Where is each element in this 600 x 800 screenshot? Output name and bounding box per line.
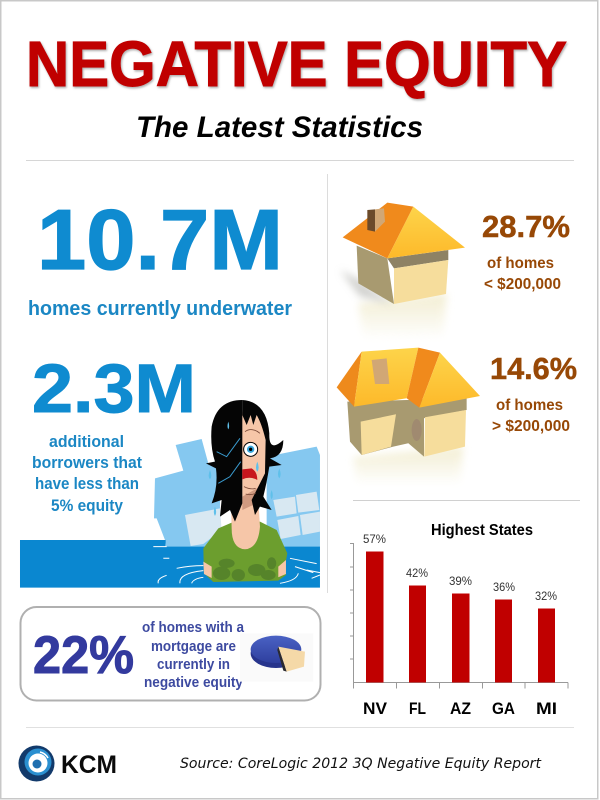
shirt: [203, 522, 287, 582]
stat: 10.7M homes underwater: [28, 193, 292, 320]
stat: 2.3M borrowers: [32, 350, 196, 515]
state labels: NV: [363, 699, 388, 718]
chart title: Highest States: [431, 522, 533, 539]
callout: 22% negative equity: mortgage are: [151, 638, 236, 655]
neck and face: [231, 411, 266, 549]
stat: 2.3M borrowers: 2.3M: [32, 350, 196, 427]
flood water: [20, 540, 320, 588]
stat: 10.7M homes underwater: 10.7M: [37, 193, 283, 288]
icon: pie chart: [240, 633, 313, 682]
stat: 28.7%: of homes: [487, 255, 554, 272]
logo: KCM: KCM: [61, 751, 117, 779]
state labels: FL: [409, 699, 426, 718]
value labels: 39%: [449, 574, 472, 588]
hair: [206, 400, 283, 522]
stat: 2.3M borrowers: additional: [49, 433, 124, 451]
stat: 28.7%: 28.7%: [482, 209, 570, 244]
logo swirl: [18, 746, 54, 782]
stat: 2.3M borrowers: borrowers that: [32, 454, 142, 472]
callout: 22% negative equity: of homes with a: [142, 619, 245, 636]
sinking house: [154, 439, 320, 548]
stat: 2.3M borrowers: 5% equity: [51, 497, 124, 515]
subtitle: The Latest Statistics: [136, 111, 423, 144]
stat: 10.7M homes underwater: homes currently underwater: [28, 298, 292, 320]
value labels: 42%: [406, 566, 428, 580]
stat: 14.6%: [490, 351, 577, 435]
stat: 28.7%: < $200,000: [484, 276, 561, 293]
face details: [209, 422, 281, 516]
stat: 14.6%: > $200,000: [492, 418, 570, 435]
callout: 22% negative equity: currently in: [157, 656, 230, 673]
house icon: over 200k: [337, 348, 480, 485]
source note: Source: CoreLogic 2012 3Q Negative Equity Report: [180, 756, 542, 772]
value labels: 57%: [363, 532, 386, 546]
callout: 22% negative equity: [20, 607, 320, 700]
stat: 2.3M borrowers: have less than: [35, 475, 139, 493]
value labels: [363, 532, 557, 603]
value labels: 36%: [493, 580, 515, 594]
callout: 22% negative equity: negative equity: [144, 674, 244, 691]
value labels: 32%: [535, 589, 557, 603]
stat: 28.7%: [482, 209, 570, 293]
state labels: MI: [536, 699, 557, 718]
stat: 14.6%: of homes: [496, 397, 563, 414]
state labels: [363, 699, 557, 718]
callout: 22% negative equity: 22%: [33, 626, 134, 685]
state labels: AZ: [450, 699, 471, 718]
bars: [366, 552, 555, 682]
illustration: woman in flood with sinking house: [20, 400, 320, 588]
house icon: under 200k: [340, 203, 465, 340]
bar chart: highest states: [350, 522, 568, 718]
title: NEGATIVE EQUITY: [26, 28, 567, 100]
state labels: GA: [492, 699, 515, 718]
stat: 14.6%: 14.6%: [490, 351, 577, 386]
axes: [350, 543, 568, 688]
logo: KCM: [18, 746, 117, 782]
